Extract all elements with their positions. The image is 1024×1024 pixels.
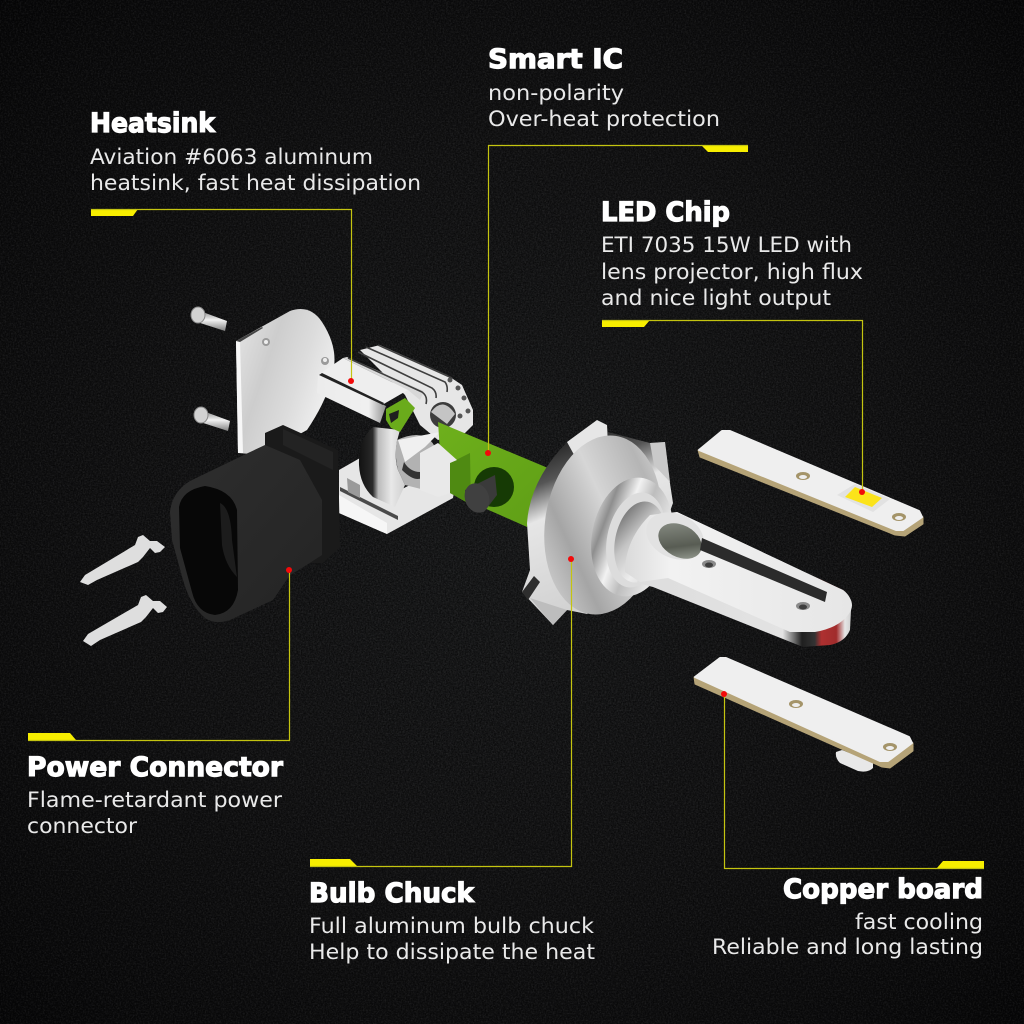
text: smart IC description: non-polarity [488, 81, 624, 105]
part: smart IC board [420, 422, 548, 527]
callout: heatsink [90, 108, 421, 384]
callout: bulb chuck [309, 556, 595, 964]
text: smart IC description: Over-heat protection [488, 107, 720, 131]
callout: smart IC [485, 44, 748, 456]
part: mounting plate [236, 309, 334, 455]
text: power connector description: connector [27, 814, 137, 838]
part: power connector [170, 425, 340, 622]
heading: copper board: Copper board [783, 874, 983, 905]
text: LED chip description: ETI 7035 15W LED with [601, 233, 852, 257]
heading: smart IC: Smart IC [488, 44, 623, 75]
text: power connector description: Flame-retardant power [27, 788, 282, 812]
heading: LED chip: LED Chip [601, 197, 730, 228]
heading: bulb chuck: Bulb Chuck [309, 878, 475, 909]
icon: upper terminal pin [80, 535, 165, 585]
icon: lower terminal pin [83, 595, 167, 646]
icon: upper mounting screw [191, 307, 227, 331]
text: copper board description: Reliable and long lasting [712, 935, 983, 959]
callout: LED chip [601, 197, 865, 495]
heading: heatsink: Heatsink [90, 108, 216, 139]
text: copper board description: fast cooling [855, 910, 983, 934]
heading: power connector: Power Connector [27, 752, 284, 783]
text: LED chip description: and nice light output [601, 286, 831, 310]
text: LED chip description: lens projector, high flux [601, 260, 863, 284]
part: copper board [694, 658, 913, 772]
text: heatsink description: heatsink, fast heat dissipation [90, 171, 421, 195]
text: bulb chuck description: Help to dissipate the heat [309, 940, 595, 964]
part: bulb chuck [522, 420, 852, 647]
text: heatsink description: Aviation #6063 aluminum [90, 145, 373, 169]
text: bulb chuck description: Full aluminum bulb chuck [309, 914, 595, 938]
part: heatsink [317, 345, 473, 534]
callout: copper board [712, 691, 984, 959]
part: LED chip board [698, 431, 923, 536]
callout: power connector [27, 567, 292, 838]
icon: lower mounting screw [194, 407, 230, 431]
